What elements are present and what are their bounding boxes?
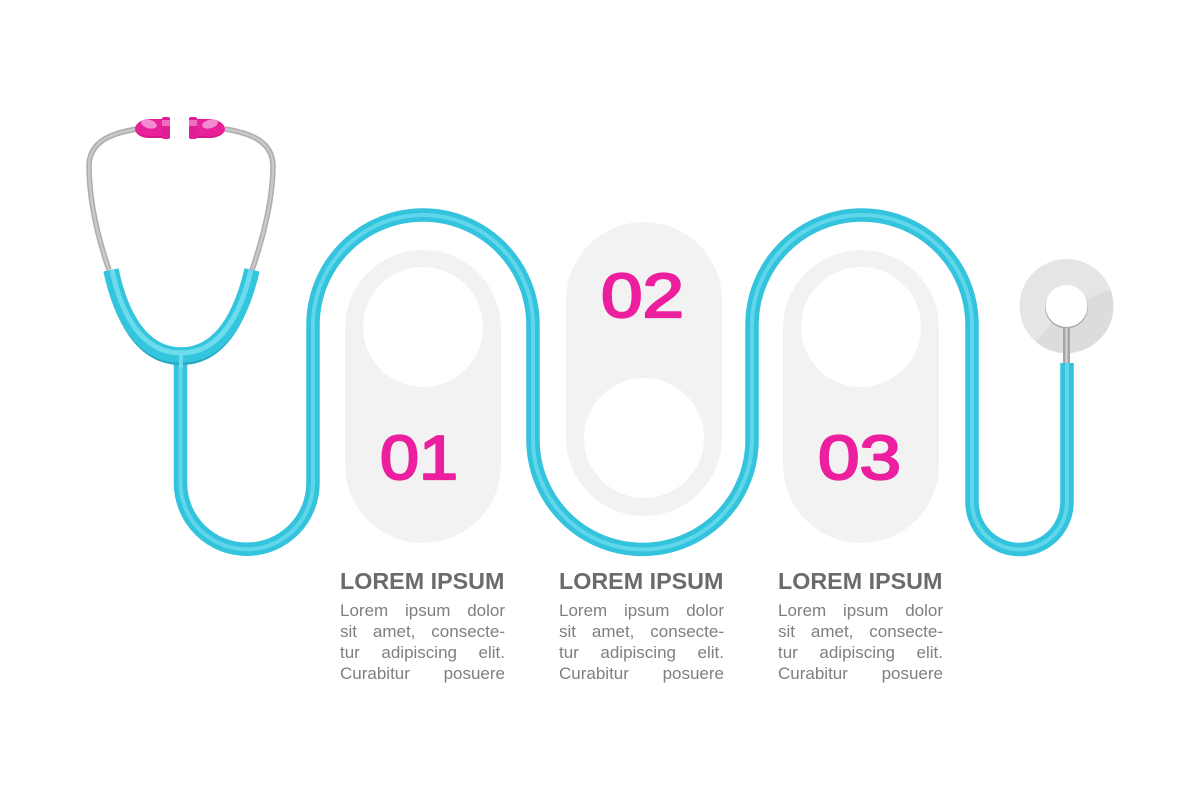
icon: stethoscope binaural ear tubes xyxy=(89,129,273,270)
text block: column 3 xyxy=(778,568,943,683)
body text 1 xyxy=(340,601,505,683)
icon: right ear tip xyxy=(189,117,225,139)
panel: pill 03 xyxy=(783,250,939,543)
heading 2: LOREM IPSUM xyxy=(559,568,723,594)
body text 3 xyxy=(778,601,943,683)
body text 2: tur adipiscing elit. xyxy=(559,643,724,662)
icon: chest piece xyxy=(1020,259,1114,364)
body text 2: Lorem ipsum dolor xyxy=(559,601,724,620)
body text 3: sit amet, consecte- xyxy=(778,622,943,641)
body text 1: Curabitur posuere xyxy=(340,664,505,683)
number 02: 02 xyxy=(601,262,684,331)
text block: column 2 xyxy=(559,568,724,683)
body text 1: Lorem ipsum dolor xyxy=(340,601,505,620)
icon: long stethoscope tube xyxy=(180,215,1067,550)
body text 1: sit amet, consecte- xyxy=(340,622,505,641)
panel: pill 02 xyxy=(566,222,722,516)
body text 2: Curabitur posuere xyxy=(559,664,724,683)
heading 1: LOREM IPSUM xyxy=(340,568,504,594)
body text 3: tur adipiscing elit. xyxy=(778,643,943,662)
icon: left ear tip xyxy=(135,117,170,139)
number 01: 01 xyxy=(380,424,458,493)
icon: Y-shaped headset yoke xyxy=(111,270,252,368)
body text 2 xyxy=(559,601,724,683)
body text 3: Curabitur posuere xyxy=(778,664,943,683)
text block: column 1 xyxy=(340,568,505,683)
number 03: 03 xyxy=(818,424,901,493)
panel: pill 01 xyxy=(345,250,501,543)
body text 2: sit amet, consecte- xyxy=(559,622,724,641)
body text 3: Lorem ipsum dolor xyxy=(778,601,943,620)
heading 3: LOREM IPSUM xyxy=(778,568,942,594)
body text 1: tur adipiscing elit. xyxy=(340,643,505,662)
